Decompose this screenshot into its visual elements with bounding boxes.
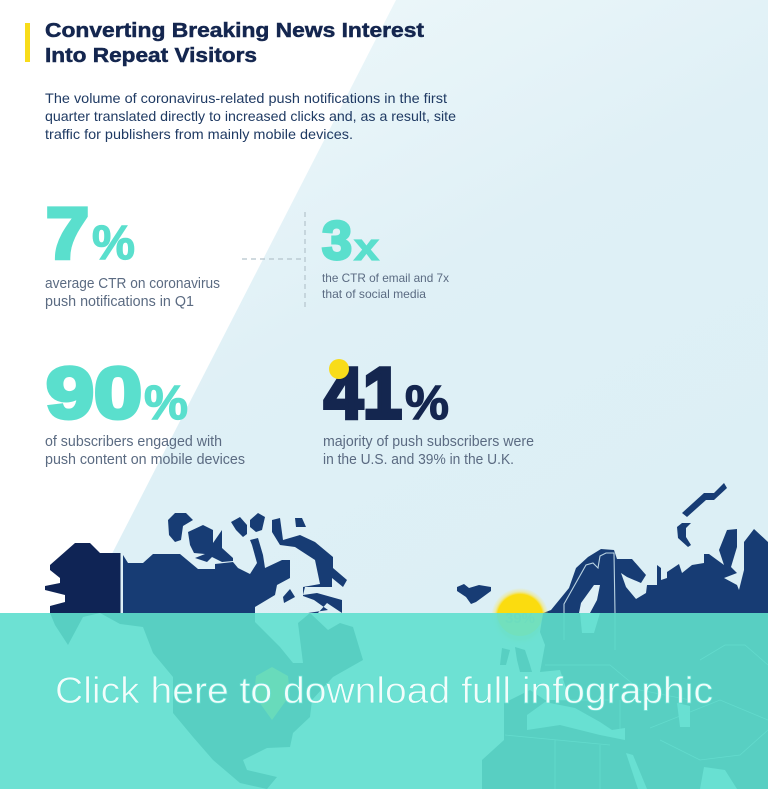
intro text (45, 90, 456, 142)
title: Converting Breaking News Interest (45, 20, 424, 42)
stat: 3x (322, 211, 449, 301)
stat: 41%: % (405, 377, 449, 430)
icon: yellow dot (329, 359, 349, 379)
dashed connector (242, 212, 305, 310)
stat: 41% (323, 354, 534, 468)
marker: 39% U.K. (491, 588, 549, 646)
intro text: quarter translated directly to increased clicks and, as a result, site (45, 108, 456, 124)
stat: 3x: x (354, 227, 379, 269)
stat: 3x: 3 (322, 211, 352, 271)
map: Alaska (45, 543, 120, 613)
title: Into Repeat Visitors (45, 45, 257, 67)
stat: 7%: push notifications in Q1 (45, 294, 194, 310)
stat: 41%: in the U.S. and 39% in the U.K. (323, 452, 514, 468)
intro text: traffic for publishers from mainly mobile devices. (45, 126, 353, 142)
title (45, 20, 424, 67)
map: British Isles under banner (500, 647, 532, 672)
stat: 7%: % (92, 217, 135, 270)
stat: 7%: 7 (46, 194, 89, 274)
map: seas under banner (527, 613, 737, 789)
map: Scandinavian borders (564, 553, 615, 613)
stat: 3x: the CTR of email and 7x (322, 271, 449, 285)
map: North America under banner (50, 613, 363, 789)
stat: 3x: that of social media (322, 287, 426, 301)
world map: upper portion (45, 483, 768, 646)
map: Canada (123, 513, 347, 613)
stat: 7% (45, 194, 220, 310)
map: Arctic islands (677, 483, 727, 547)
stat: 90%: 90 (46, 354, 142, 434)
stat: 90%: % (144, 377, 188, 430)
stat: 90%: push content on mobile devices (45, 452, 245, 468)
marker: U.S. pin under banner (254, 667, 290, 720)
stat: 90%: of subscribers engaged with (45, 434, 222, 450)
map: Baltic sea (579, 585, 600, 613)
map: Europe and Russia (543, 529, 768, 613)
stat: 41%: 41 (324, 354, 402, 434)
marker: 39% under banner (497, 613, 543, 636)
map: country borders under banner (505, 613, 768, 789)
stat: 90% (45, 354, 245, 468)
marker: 39% U.K.: 39% (505, 610, 535, 627)
map: Europe and Asia under banner (482, 613, 768, 789)
stat: 41%: majority of push subscribers were (323, 434, 534, 450)
stat: 7%: average CTR on coronavirus (45, 276, 220, 292)
map: Iceland (457, 584, 491, 604)
title accent bar (25, 23, 30, 62)
intro text: The volume of coronavirus-related push notifications in the first (45, 90, 447, 106)
banner text: Click here to download full infographic (55, 670, 713, 711)
call to action banner (0, 613, 768, 789)
